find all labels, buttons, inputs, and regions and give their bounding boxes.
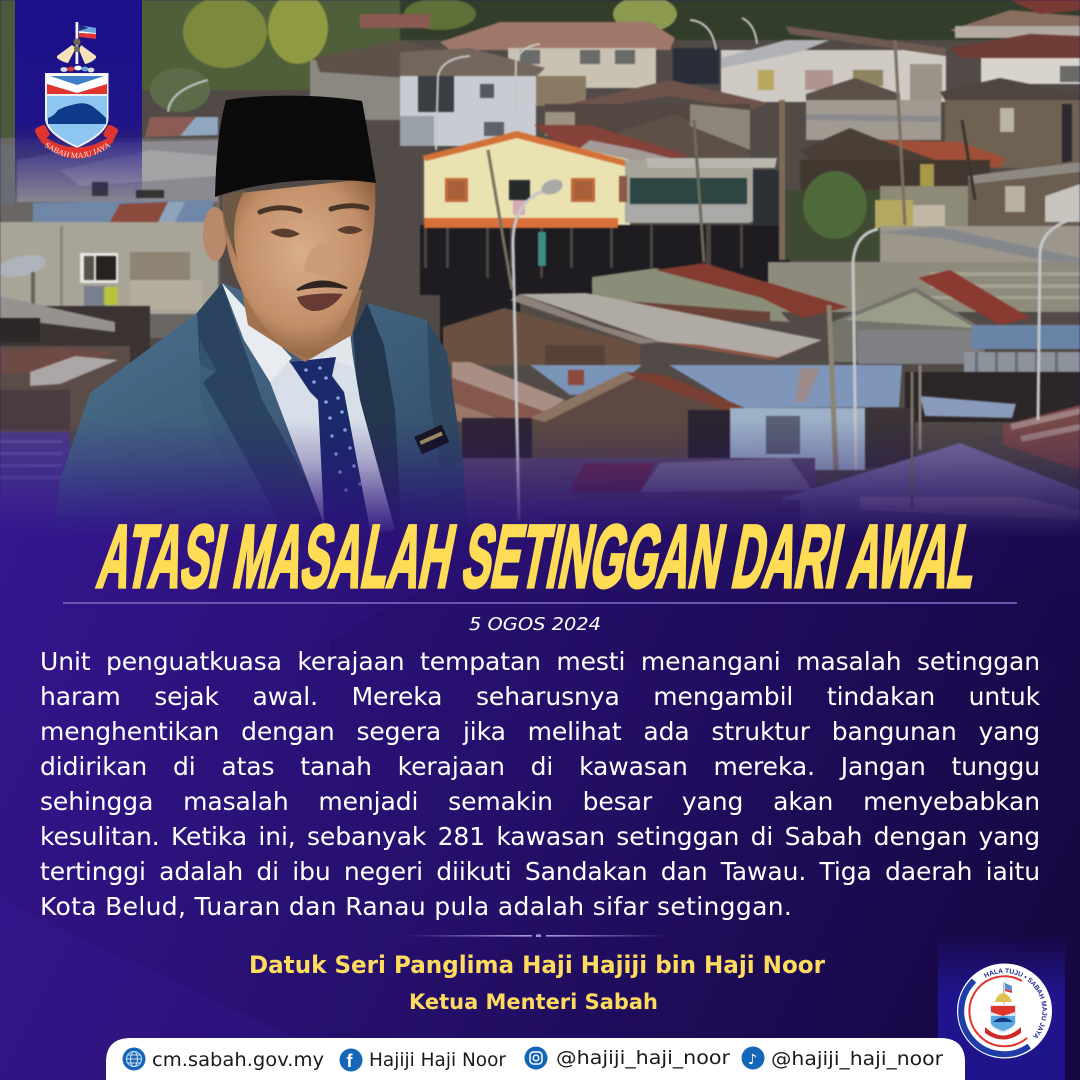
body paragraph: kesulitan. Ketika ini, sebanyak 281 kawasan setinggan di Sabah dengan yang	[40, 822, 1040, 851]
body paragraph: menghentikan dengan segera jika melihat ada struktur bangunan yang	[40, 717, 1040, 746]
body paragraph: haram sejak awal. Mereka seharusnya mengambil tindakan untuk	[40, 682, 1040, 711]
signature: name and position: Datuk Seri Panglima Haji Hajiji bin Haji Noor	[249, 951, 825, 979]
necktie	[290, 357, 372, 540]
face and neck	[203, 178, 375, 362]
name badge	[414, 425, 449, 454]
mid right houses	[779, 100, 1080, 286]
badge mini crest	[985, 982, 1021, 1040]
divider under title	[63, 602, 1017, 604]
body paragraph: tertinggi adalah di ibu negeri diikuti Sandakan dan Tawau. Tiga daerah iaitu	[40, 857, 1040, 886]
portrait: man in songkok and blue suit	[56, 96, 466, 532]
body paragraph: Unit penguatkuasa kerajaan tempatan mesti menangani masalah setinggan	[40, 647, 1040, 676]
signature: name and position: Ketua Menteri Sabah	[409, 990, 658, 1014]
tiktok: @hajiji_haji_noor	[771, 1048, 943, 1070]
wreath beads	[60, 66, 94, 72]
background photo: stilt village settlement	[0, 0, 1080, 528]
flag on pole	[76, 22, 96, 64]
arms holding pole	[57, 38, 96, 64]
facebook: f	[346, 1051, 354, 1071]
body paragraph: Kota Belud, Tuaran dan Ranau pula adalah sifar setinggan.	[40, 892, 792, 921]
white pill	[106, 1038, 965, 1080]
shield	[45, 73, 108, 148]
ribbon with motto: SABAH MAJU JAYA	[44, 142, 111, 158]
street lamps and poles	[168, 18, 1075, 520]
instagram: @hajiji_haji_noor	[556, 1047, 730, 1069]
suit jacket	[53, 283, 468, 540]
facebook: Hajiji Haji Noor	[369, 1049, 506, 1071]
upper hillside houses	[310, 0, 1080, 200]
body paragraph: didirikan di atas tanah kerajaan di kawasan mereka. Jangan tunggu	[40, 752, 1040, 781]
lower roofs	[0, 262, 1080, 540]
lamp heads	[539, 177, 565, 197]
songkok cap	[215, 96, 376, 197]
tiktok: ♪	[748, 1052, 757, 1068]
trees and hillside	[0, 0, 1080, 234]
main cream stilt house	[420, 125, 790, 295]
ribbon with motto	[34, 124, 118, 158]
date: 5 OGOS 2024	[469, 614, 601, 635]
body paragraph: sehingga masalah menjadi semakin besar yang akan menyebabkan	[40, 787, 1040, 816]
website: cm.sabah.gov.my	[152, 1049, 324, 1071]
purple fade and gradient panel	[0, 426, 1080, 1080]
left side houses	[0, 117, 220, 532]
top left blue logo panel	[15, 0, 142, 200]
round badge: Hala Tuju Sabah Maju Jaya: HALA TUJU • SABAH MAJU JAYA	[984, 968, 1047, 1038]
body paragraph	[40, 647, 1040, 921]
crest: Sabah coat of arms top left	[34, 22, 118, 158]
shirt and collar	[222, 283, 395, 540]
